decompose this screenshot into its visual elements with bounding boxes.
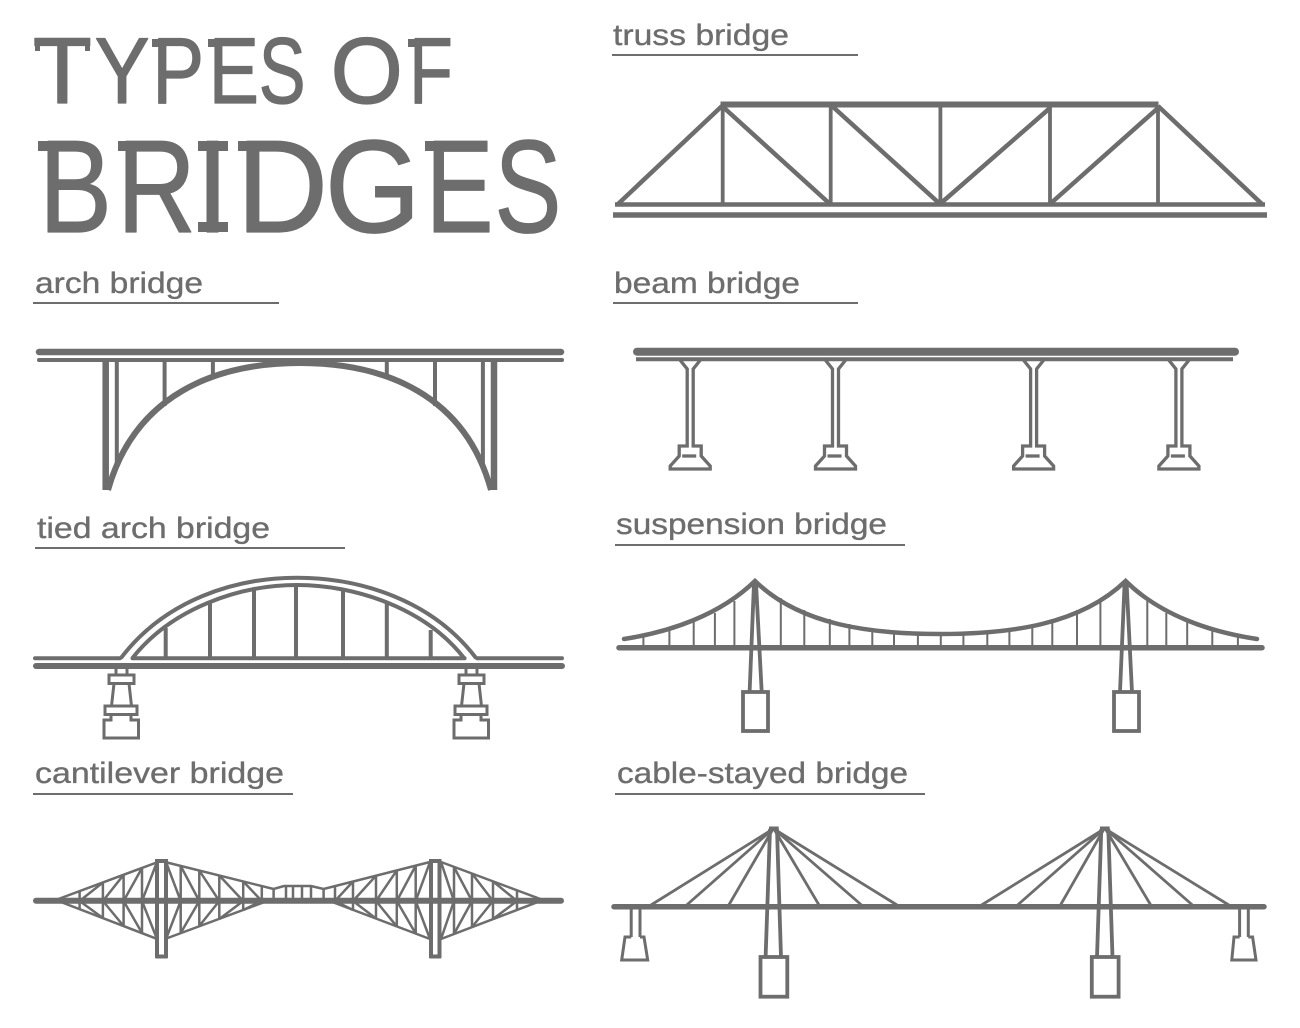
title line: types of: S xyxy=(259,18,306,123)
drawing: truss bridge xyxy=(613,104,1267,215)
drawing: suspension bridge xyxy=(619,581,1262,731)
title line: bridges: B xyxy=(39,113,112,260)
panel: cantilever bridge xyxy=(33,757,561,958)
panel: arch bridge xyxy=(33,267,562,490)
title line: bridges: I xyxy=(196,113,229,260)
title line: bridges: D xyxy=(237,113,328,260)
title xyxy=(33,18,561,260)
heading: arch bridge: arch bridge xyxy=(35,267,203,300)
panel: cable-stayed bridge xyxy=(614,757,1264,997)
title line: bridges: E xyxy=(426,113,494,260)
title line: types of: Y xyxy=(95,18,150,123)
panel: tied arch bridge xyxy=(35,512,562,738)
title line: types of: E xyxy=(209,18,259,123)
panel: suspension bridge xyxy=(615,508,1262,731)
title line: bridges: S xyxy=(494,113,561,260)
drawing: tied arch bridge xyxy=(35,578,562,738)
title line: types of: O xyxy=(330,18,403,123)
heading: beam bridge: beam bridge xyxy=(614,267,800,300)
drawing: beam bridge xyxy=(636,352,1235,469)
panel: truss bridge xyxy=(612,19,1267,215)
heading: tied arch bridge: tied arch bridge xyxy=(37,512,270,545)
drawing: arch bridge xyxy=(39,352,562,490)
drawing: cable-stayed bridge xyxy=(614,828,1264,997)
title line: types of: T xyxy=(33,18,92,123)
title line: types of: F xyxy=(409,18,453,123)
title line: types of: P xyxy=(152,18,204,123)
panel: beam bridge xyxy=(613,267,1235,469)
title line: bridges: G xyxy=(325,113,421,260)
heading: cantilever bridge: cantilever bridge xyxy=(35,757,284,790)
title slab serifs xyxy=(35,38,436,232)
heading: truss bridge: truss bridge xyxy=(613,19,789,52)
title line: bridges: R xyxy=(117,113,196,260)
heading: suspension bridge: suspension bridge xyxy=(616,508,887,541)
drawing: cantilever bridge xyxy=(36,859,561,958)
heading: cable-stayed bridge: cable-stayed bridge xyxy=(617,757,908,790)
